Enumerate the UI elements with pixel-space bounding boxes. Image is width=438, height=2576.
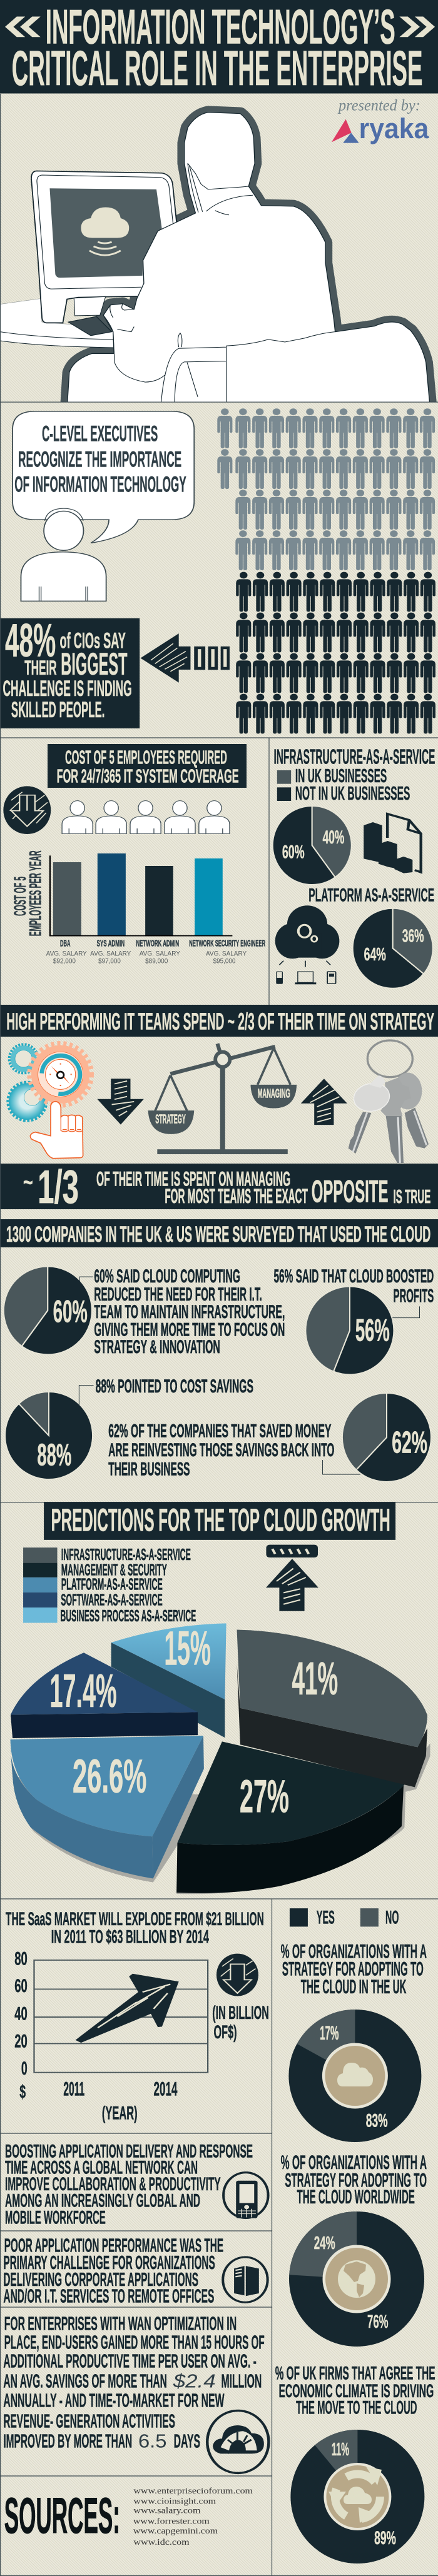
bar labels: $97,000 xyxy=(98,957,121,965)
pie chart: 60 percent xyxy=(4,1266,92,1354)
text: 60 percent: REDUCED THE NEED FOR THEIR I.T. xyxy=(94,1285,262,1305)
donut chart: UK 83 percent xyxy=(288,2010,421,2142)
heading xyxy=(57,747,239,787)
source list: www.forrester.com xyxy=(133,2517,210,2526)
text block xyxy=(3,2235,223,2307)
slice: software xyxy=(11,1653,198,1738)
text: 60 percent xyxy=(94,1267,285,1357)
monitor stand xyxy=(74,296,106,316)
bar chart: salaries xyxy=(50,853,232,936)
source list: www.enterprisecioforum.com xyxy=(133,2487,253,2496)
icon: sketched down arrow badge xyxy=(3,786,51,834)
donut chart: worldwide 76 percent: 76% xyxy=(367,2312,388,2332)
heading: worldwide strategy xyxy=(281,2152,427,2208)
icon: gears and pointing hand xyxy=(8,1044,91,1159)
presented by text: presented by: xyxy=(337,96,420,114)
text: MILLION xyxy=(222,2370,262,2392)
panel: cost of employees: EMPLOYEES PER YEAR xyxy=(26,850,45,936)
pie labels xyxy=(37,1294,427,1472)
bar labels: SYS ADMIN xyxy=(96,938,125,948)
bar labels: $89,000 xyxy=(145,957,168,965)
panel: cost of employees xyxy=(3,744,265,965)
line chart frame xyxy=(34,1960,208,2073)
bubble text xyxy=(14,421,186,496)
divider lines around cost section xyxy=(0,738,438,1005)
axis labels xyxy=(14,1948,269,2124)
axis labels: 2011 xyxy=(63,2078,84,2100)
bar labels: NETWORK ADMIN xyxy=(136,938,179,948)
pie chart: infrastructure 60/40 xyxy=(273,806,352,885)
icon: left chevrons xyxy=(5,17,41,37)
icon: cloud with gears and devices xyxy=(275,905,339,984)
man figure xyxy=(67,113,430,408)
monitor screen xyxy=(49,188,162,278)
icon: balance scale: MANAGING xyxy=(258,1087,290,1101)
icons: five employees xyxy=(62,801,230,833)
panel: predictions for cloud growth: BUSINESS PROCESS AS-A-SERVICE xyxy=(60,1606,196,1625)
slice labels: 26.6% xyxy=(73,1749,146,1803)
slice: management and security xyxy=(176,1741,405,1893)
panel: man at computer illustration xyxy=(0,113,430,408)
speech bubble xyxy=(13,411,194,543)
icon: sketched rising arrow xyxy=(76,1974,179,2043)
icon: cloud with signal xyxy=(81,207,129,255)
text: 60 percent: TEAM TO MAINTAIN INFRASTRUCTURE, xyxy=(94,1302,285,1322)
bar labels: $92,000 xyxy=(53,957,76,965)
text block xyxy=(5,2141,253,2228)
pie labels: 88% xyxy=(37,1439,71,1472)
icon: sketched left arrow xyxy=(141,633,230,683)
axis labels: 2014 xyxy=(154,2078,178,2100)
heading xyxy=(6,1908,264,1948)
icon: balance scale: STRATEGY xyxy=(155,1112,186,1126)
donut chart: UK 83 percent: 83% xyxy=(366,2110,388,2131)
panel: c-level executives: C-LEVEL EXECUTIVES xyxy=(42,421,158,446)
3d pie chart: 41% xyxy=(292,1653,338,1704)
text: NETWORK SECURITY ENGINEER xyxy=(189,938,265,948)
slice: business process xyxy=(111,1623,227,1738)
icon: keys xyxy=(349,1040,429,1163)
bar labels: AVG. SALARY xyxy=(140,949,180,957)
banner: one third managing: ~ xyxy=(23,1169,33,1195)
axis labels: (YEAR) xyxy=(102,2103,138,2124)
banner: one third managing: 1/3 xyxy=(38,1160,79,1213)
axis labels: 80 xyxy=(14,1948,28,1970)
text block: 6.5 xyxy=(138,2430,167,2452)
icon: sketched up arrow with bar xyxy=(266,1545,318,1611)
bar labels: $95,000 xyxy=(213,957,235,965)
pie labels: 40% xyxy=(323,827,344,848)
keyboard xyxy=(68,316,112,336)
panel: c-level executives: CHALLENGE IS FINDING xyxy=(3,677,132,701)
bar labels: DBA xyxy=(60,938,71,948)
pie chart: 88 percent xyxy=(5,1392,93,1479)
text block: REVENUE- GENERATION ACTIVITIES xyxy=(3,2410,175,2432)
divider line under man xyxy=(0,401,438,403)
slice labels xyxy=(49,1622,338,1823)
legend: yes and no xyxy=(290,1907,399,1928)
pie labels: 60% xyxy=(282,841,305,862)
panel: sources: SOURCES: xyxy=(4,2488,120,2543)
slice: platform xyxy=(11,1736,204,1879)
bar labels: AVG. SALARY xyxy=(46,949,87,957)
text block: DAYS xyxy=(174,2430,200,2452)
panel: predictions for cloud growth xyxy=(11,1502,430,1894)
legend: PLATFORM-AS-A-SERVICE xyxy=(61,1575,163,1593)
icon: smartphone xyxy=(223,2173,268,2218)
source list: www.capgemini.com xyxy=(133,2527,218,2535)
donut chart: UK 83 percent: 17% xyxy=(320,2023,339,2044)
icon: right chevrons xyxy=(399,17,435,37)
pie chart: platform 64/36 xyxy=(353,908,433,989)
figure linework xyxy=(103,163,335,408)
text block: IMPROVED BY MORE THAN xyxy=(3,2430,132,2452)
text: (IN BILLION xyxy=(212,2002,269,2023)
bar labels: AVG. SALARY xyxy=(206,949,247,957)
pie chart: 62 percent xyxy=(342,1393,431,1482)
pie chart: 56 percent xyxy=(305,1287,394,1374)
text: 60 percent: 60% SAID CLOUD COMPUTING xyxy=(94,1267,240,1287)
text: 62 percent: THEIR BUSINESS xyxy=(108,1459,190,1479)
legend: yes and no: YES xyxy=(317,1907,335,1928)
bar labels xyxy=(46,938,265,965)
panel: as-a-service xyxy=(273,745,435,989)
icon: servers and document xyxy=(364,814,421,873)
icon: balance scale xyxy=(148,1043,297,1154)
text: 62 percent xyxy=(108,1421,334,1479)
pictogram: dark people xyxy=(236,572,435,734)
source list xyxy=(133,2487,253,2547)
icon: sketched down arrow badge xyxy=(216,1954,258,1996)
panel: cloud adoption donuts xyxy=(275,1907,435,2563)
icon: executive outline xyxy=(21,508,106,601)
text block: MOBILE WORKFORCE xyxy=(5,2207,106,2228)
source list: www.cioinsight.com xyxy=(133,2497,216,2506)
donut chart: UK firms 89 percent: 11% xyxy=(332,2440,349,2460)
icon: sketched down arrow xyxy=(97,1079,144,1125)
icon: sketched up arrow xyxy=(301,1079,347,1125)
pie labels xyxy=(282,827,424,965)
banner: one third managing xyxy=(0,1160,438,1213)
axis labels: $ xyxy=(19,2081,26,2103)
callout: 48% of CIOs xyxy=(0,614,140,728)
axis labels: 40 xyxy=(14,2003,28,2025)
3d pie chart xyxy=(11,1622,430,1894)
text block: $2.4 xyxy=(173,2370,216,2392)
panel: strategy vs managing xyxy=(97,1043,347,1154)
legend: MANAGEMENT & SECURITY xyxy=(61,1561,167,1579)
slice: infrastructure xyxy=(237,1630,427,1787)
pie labels: 64% xyxy=(364,945,386,965)
callout: 48% of CIOs: 48% xyxy=(5,614,56,667)
axis title xyxy=(11,850,45,936)
text block xyxy=(3,2313,265,2452)
panel: c-level executives: BIGGEST xyxy=(61,647,128,682)
text: 60 percent: GIVING THEM MORE TIME TO FOCUS ON xyxy=(94,1320,285,1341)
heading: UK firms xyxy=(275,2363,435,2418)
text: 60 percent: STRATEGY & INNOVATION xyxy=(94,1337,220,1357)
panel: c-level executives: RECOGNIZE THE IMPORTANCE xyxy=(18,447,181,471)
monitor xyxy=(31,171,176,323)
silhouette halo xyxy=(67,113,430,408)
bar labels: AVG. SALARY xyxy=(90,949,131,957)
donut chart: worldwide 76 percent xyxy=(289,2211,424,2347)
panel: sources xyxy=(4,2487,253,2547)
icon: cloud speedometer xyxy=(207,2411,268,2473)
panel: application delivery text xyxy=(5,2141,268,2228)
pie labels: 60% xyxy=(53,1294,88,1329)
slice labels: 27% xyxy=(240,1771,289,1823)
pictogram: gray people xyxy=(217,408,435,570)
legend: SOFTWARE-AS-A-SERVICE xyxy=(61,1591,163,1609)
axis labels: OF$) xyxy=(213,2021,237,2043)
panel: cloud adoption donuts: NO xyxy=(385,1907,399,1928)
text: 88 percent: 88% POINTED TO COST SAVINGS xyxy=(96,1377,253,1397)
heading: IN 2011 TO $63 BILLION BY 2014 xyxy=(51,1926,209,1948)
callout: 48% of CIOs: THEIR xyxy=(24,657,57,679)
source list: www.idc.com xyxy=(133,2538,190,2547)
panel: SaaS market chart xyxy=(6,1908,269,2124)
panel: cloud survey pies xyxy=(4,1266,434,1482)
axis labels: 20 xyxy=(14,2031,28,2052)
panel: poor application performance xyxy=(3,2235,268,2307)
text: 56 percent xyxy=(273,1267,434,1307)
panel: predictions for cloud growth: INFRASTRUCTURE-AS-A-SERVICE xyxy=(61,1545,191,1564)
text block: AN AVG. SAVINGS OF MORE THAN xyxy=(3,2370,167,2392)
panel: c-level executives: of CIOs SAY xyxy=(60,628,126,653)
panel: WAN optimization xyxy=(3,2313,268,2473)
slice labels: 17.4% xyxy=(49,1664,117,1717)
icon: server xyxy=(223,2257,268,2302)
slice labels: 15% xyxy=(164,1622,211,1676)
donut chart: UK firms 89 percent: 89% xyxy=(374,2528,396,2548)
source list: www.salary.com xyxy=(133,2506,201,2515)
pie labels: 56% xyxy=(355,1313,390,1348)
legend xyxy=(277,765,410,804)
callout: 48% of CIOs: SKILLED PEOPLE. xyxy=(11,698,104,722)
heading: UK strategy xyxy=(281,1941,427,1998)
leader lines xyxy=(79,1277,419,1474)
panel: title banner xyxy=(0,0,438,96)
axis labels: 0 xyxy=(21,2058,28,2079)
icon: Aryaka triangle xyxy=(332,119,359,143)
panel: c-level executives xyxy=(0,408,435,734)
donut chart: UK firms 89 percent xyxy=(290,2430,424,2563)
donut chart: worldwide 76 percent: 24% xyxy=(314,2233,335,2253)
legend xyxy=(23,1545,196,1625)
axis title: COST OF 5 xyxy=(11,877,29,916)
panel: presented by logo xyxy=(332,96,429,145)
axis labels: 60 xyxy=(14,1976,28,1996)
table xyxy=(0,299,115,348)
